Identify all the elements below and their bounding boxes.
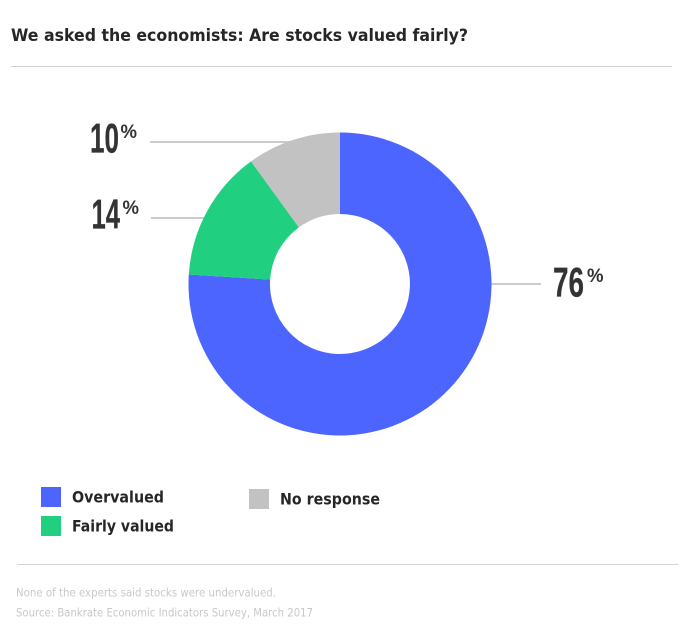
leader line: 76%	[480, 283, 541, 285]
title: We asked the economists: Are stocks valued fairly?	[11, 26, 468, 46]
legend item: overvalued: Overvalued	[72, 488, 164, 506]
footnote: None of the experts said stocks were undervalued.	[16, 586, 276, 600]
leader line: 14%	[151, 217, 215, 219]
segment: overvalued 76%	[189, 132, 492, 436]
legend item: no response	[249, 489, 380, 509]
source: Source: Bankrate Economic Indicators Survey, March 2017	[16, 606, 313, 620]
legend item: no response: No response	[280, 490, 380, 508]
segment: no response 10%	[251, 132, 340, 227]
label: 14%: 14	[92, 190, 120, 238]
segment: fairly valued 14%	[189, 161, 299, 280]
label: 14%: %	[122, 198, 139, 219]
leader line: 10%	[150, 141, 340, 143]
legend item: fairly valued	[41, 516, 174, 536]
label: 76%: %	[587, 266, 604, 287]
label: 76%: 76	[553, 258, 584, 306]
donut chart	[150, 132, 541, 436]
legend	[41, 487, 380, 536]
legend item: overvalued	[41, 487, 164, 507]
label: 10%: 10	[90, 114, 119, 162]
legend item: fairly valued: Fairly valued	[72, 516, 174, 536]
label: 10%: %	[120, 122, 137, 143]
